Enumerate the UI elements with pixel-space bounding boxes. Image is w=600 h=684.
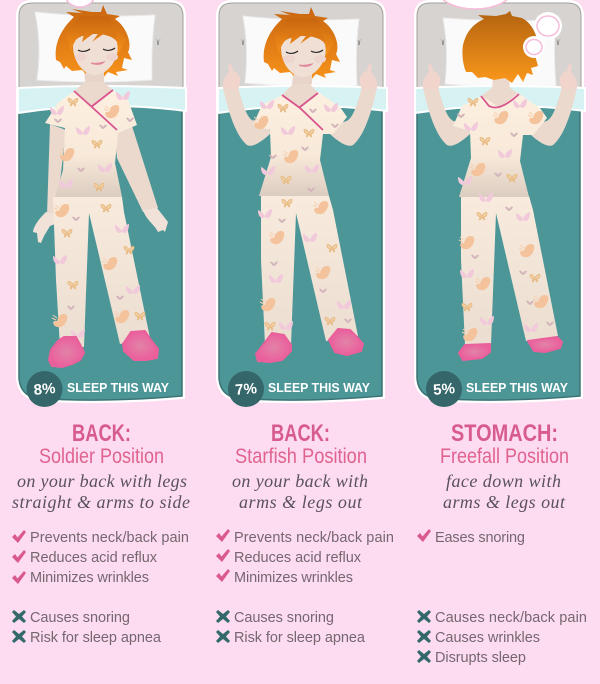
drawbacks list: Disrupts sleep <box>435 650 526 666</box>
benefits list: Minimizes wrinkles <box>30 570 149 586</box>
drawbacks list <box>12 610 162 646</box>
drawbacks list: Risk for sleep apnea <box>234 630 366 646</box>
figure: woman face down with arms and legs out <box>423 11 577 360</box>
drawbacks list: Causes snoring <box>30 610 130 626</box>
benefits list <box>216 529 394 586</box>
benefits list: Reduces acid reflux <box>30 550 158 566</box>
description <box>232 471 368 512</box>
benefits list <box>12 530 189 586</box>
subheading: Soldier Position <box>39 444 164 468</box>
bed headboard <box>417 3 581 96</box>
drawbacks list: Causes snoring <box>234 610 334 626</box>
description <box>443 471 566 512</box>
bed headboard <box>219 3 383 96</box>
badge caption: SLEEP THIS WAY <box>268 381 371 395</box>
heading: BACK: <box>271 420 330 447</box>
drawbacks list <box>417 610 587 666</box>
badge caption: SLEEP THIS WAY <box>67 381 170 395</box>
heading: STOMACH: <box>451 420 558 447</box>
description: straight & arms to side <box>12 492 190 512</box>
bed headboard <box>19 3 183 96</box>
panel: starfish position bed illustration <box>218 3 387 407</box>
percentage badge <box>26 371 62 407</box>
description: arms & legs out <box>443 492 566 512</box>
subheading: Freefall Position <box>440 444 569 468</box>
percentage badge: 8% <box>33 380 56 399</box>
drawbacks list <box>216 610 366 646</box>
column text: starfish position <box>216 420 394 646</box>
drawbacks list: Risk for sleep apnea <box>30 630 162 646</box>
pillow <box>443 18 556 87</box>
percentage badge <box>228 371 264 407</box>
panel: soldier position bed illustration <box>18 0 186 407</box>
thought bubbles <box>438 0 562 58</box>
description: face down with <box>446 471 561 491</box>
description: on your back with <box>232 471 368 491</box>
badge caption: SLEEP THIS WAY <box>466 381 569 395</box>
benefits list: Prevents neck/back pain <box>30 530 189 546</box>
sheet band <box>18 86 186 113</box>
description: arms & legs out <box>239 492 363 512</box>
drawbacks list: Causes wrinkles <box>435 630 540 646</box>
description <box>12 471 190 512</box>
heading: BACK: <box>72 420 131 447</box>
benefits list: Minimizes wrinkles <box>234 570 353 586</box>
pillow <box>35 12 155 82</box>
column text: freefall position <box>417 420 587 666</box>
percentage badge: 5% <box>433 380 456 399</box>
figure: woman on back with arms at sides <box>33 5 168 367</box>
thought bubble <box>65 0 95 7</box>
sheet band <box>218 86 387 113</box>
benefits list: Reduces acid reflux <box>234 550 362 566</box>
mattress <box>417 96 580 400</box>
mattress <box>219 96 382 400</box>
percentage badge <box>426 371 462 407</box>
panel: freefall position bed illustration <box>415 0 585 407</box>
drawbacks list: Causes neck/back pain <box>435 610 587 626</box>
column text: soldier position <box>12 420 190 646</box>
sheet band <box>415 86 585 113</box>
subheading: Starfish Position <box>235 444 367 468</box>
benefits list: Prevents neck/back pain <box>234 530 394 546</box>
mattress <box>19 96 182 400</box>
description: on your back with legs <box>17 471 187 491</box>
figure: woman on back with arms and legs out <box>223 7 377 362</box>
percentage badge: 7% <box>235 380 258 399</box>
benefits list: Eases snoring <box>435 530 525 546</box>
pillow <box>243 16 359 87</box>
